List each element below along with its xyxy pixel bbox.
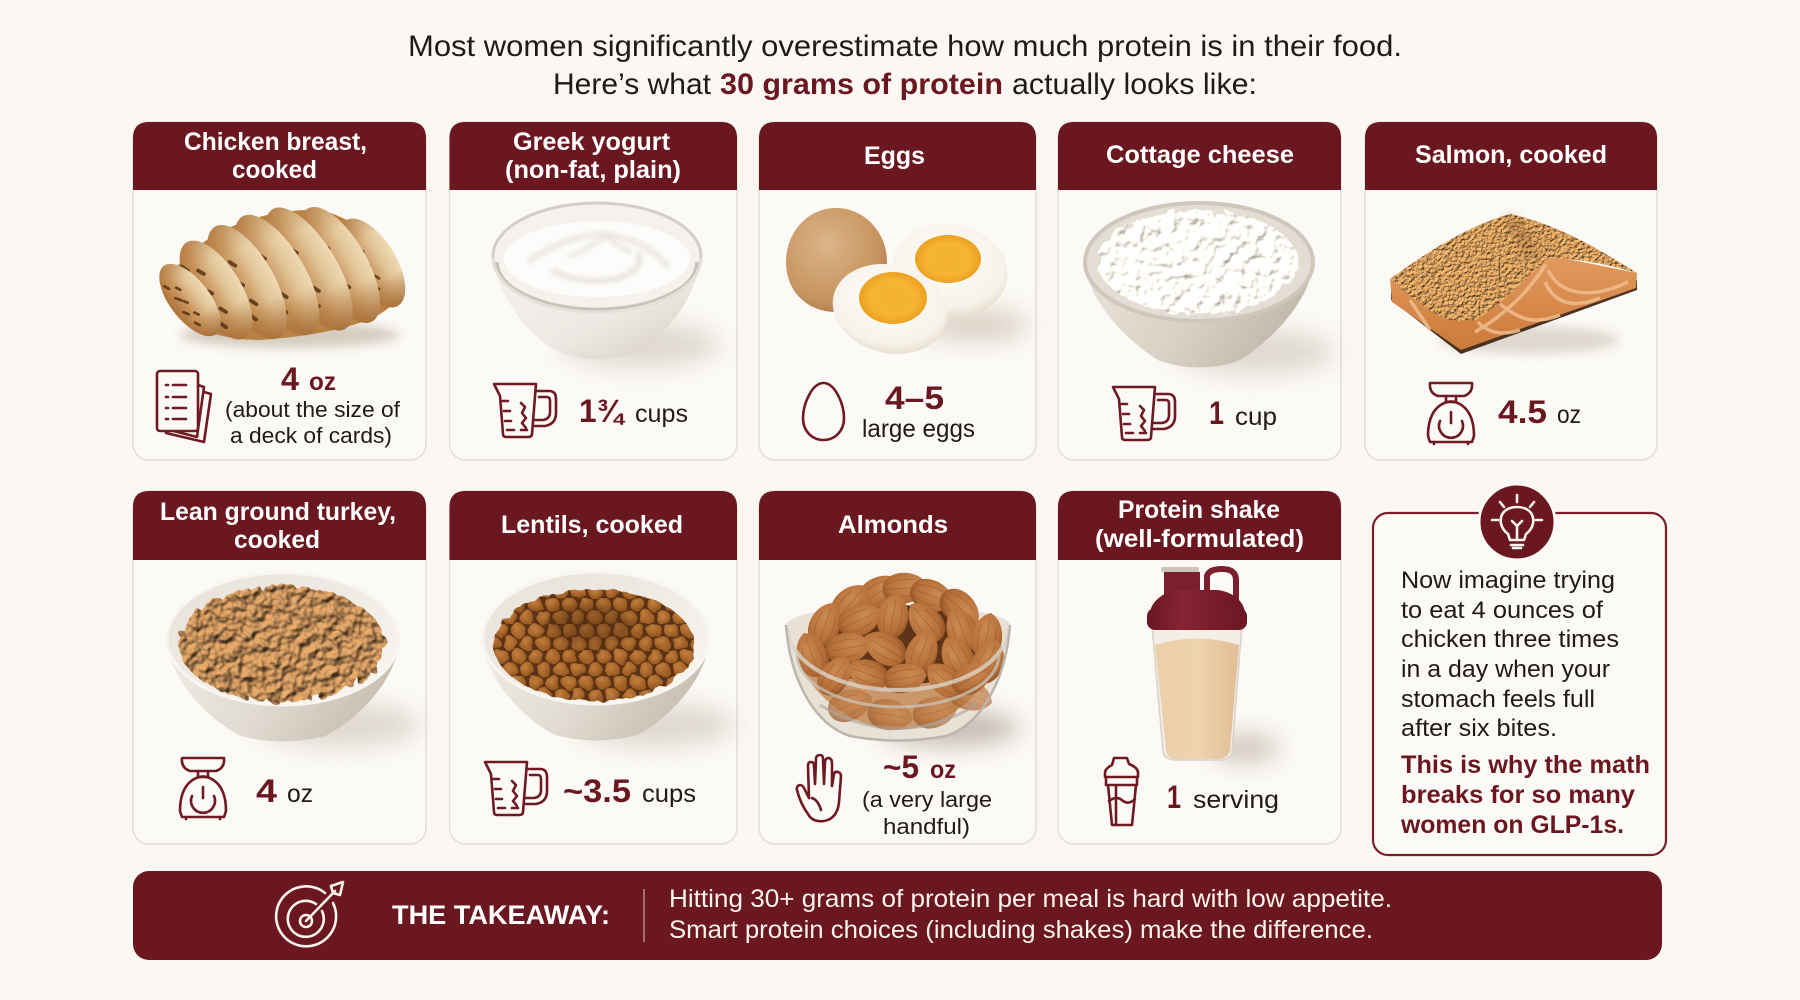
- photo: yogurt in glass bowl: [493, 203, 720, 367]
- amount: 1 cup: [1209, 395, 1277, 431]
- panel: greek yogurt: [450, 122, 737, 460]
- icon: measuring cup: [485, 762, 547, 815]
- icon: lightbulb badge: [1479, 484, 1555, 560]
- callout text: [1400, 567, 1650, 839]
- amount: ~3.5 cups: [563, 773, 696, 809]
- heading: chicken breast: [184, 128, 367, 184]
- callout text: after six bites.: [1401, 715, 1557, 742]
- amount: 4.5 oz: 4.5: [1498, 394, 1547, 430]
- callout text: breaks for so many: [1401, 781, 1635, 809]
- takeaway text: Hitting 30+ grams of protein per meal is hard with low appetite.: [669, 885, 1392, 913]
- icon: open hand: [797, 755, 841, 821]
- callout text: chicken three times: [1401, 626, 1619, 653]
- amount: 4 oz: oz: [287, 780, 313, 808]
- heading: lean ground turkey: Lean ground turkey,: [160, 498, 396, 526]
- icon: measuring cup: [494, 384, 556, 437]
- callout: imagine eating chicken: [1373, 484, 1666, 855]
- amount: 4–5 large eggs: 4–5: [885, 380, 944, 416]
- icon: shaker: [1105, 758, 1138, 825]
- title: actually looks like:: [1012, 68, 1257, 101]
- amount: ~5 oz, a very large handful: handful): [883, 814, 970, 839]
- icon: target with arrow: [276, 882, 343, 946]
- heading: almonds: Almonds: [838, 511, 948, 539]
- amount: 4.5 oz: [1498, 394, 1581, 430]
- amount: 4 oz, deck of cards: (about the size of: [225, 397, 401, 422]
- heading: protein shake: [1095, 496, 1304, 553]
- amount: 4.5 oz: oz: [1557, 401, 1581, 429]
- photo: bowl of ground turkey: [166, 573, 420, 747]
- photo: bowl of cottage cheese: [1084, 203, 1335, 374]
- panel: cottage cheese: [1058, 122, 1341, 460]
- amount: ~5 oz, a very large handful: ~5: [883, 749, 919, 785]
- photo: salmon fillet: [1390, 214, 1637, 354]
- callout text: women on GLP-1s.: [1400, 811, 1624, 839]
- icon: measuring cup: [1113, 387, 1175, 440]
- panel: salmon: [1365, 122, 1657, 460]
- amount: 4 oz, deck of cards: a deck of cards): [230, 423, 392, 448]
- amount: 1¾ cups: [579, 393, 688, 429]
- amount: 1 serving: serving: [1193, 786, 1279, 814]
- panel: takeaway banner: [133, 871, 1662, 960]
- heading: salmon: Salmon, cooked: [1415, 141, 1607, 169]
- amount: 1¾ cups: cups: [635, 400, 688, 428]
- callout text: to eat 4 ounces of: [1401, 597, 1603, 624]
- heading: lentils: Lentils, cooked: [501, 511, 683, 539]
- photo: shaker bottle: [1147, 567, 1279, 762]
- amount: 4 oz, deck of cards: [225, 361, 401, 448]
- callout text: in a day when your: [1401, 656, 1610, 683]
- callout text: Now imagine trying: [1401, 567, 1615, 594]
- heading: protein shake: Protein shake: [1118, 496, 1280, 524]
- photo: glass bowl of almonds: [786, 567, 1020, 746]
- amount: 4 oz: [256, 773, 313, 809]
- amount: 4–5 large eggs: large eggs: [862, 415, 975, 443]
- amount: ~5 oz, a very large handful: (a very large: [862, 787, 992, 812]
- panel: chicken breast: [133, 122, 426, 460]
- heading: greek yogurt: (non-fat, plain): [505, 156, 681, 184]
- heading: chicken breast: Chicken breast,: [184, 128, 367, 156]
- title: 30 grams of protein: [720, 68, 1003, 101]
- amount: 1¾ cups: 1¾: [579, 393, 625, 429]
- title: [408, 30, 1402, 101]
- icon: kitchen scale: [180, 758, 226, 819]
- amount: 4–5 large eggs: [862, 380, 975, 443]
- amount: ~5 oz, a very large handful: [862, 749, 992, 839]
- heading: greek yogurt: [505, 128, 681, 184]
- heading: protein shake: (well-formulated): [1095, 525, 1304, 553]
- takeaway label: THE TAKEAWAY:: [392, 900, 610, 930]
- amount: 1 cup: cup: [1235, 403, 1277, 431]
- amount: 1 serving: [1167, 779, 1279, 815]
- amount: 1 serving: 1: [1167, 779, 1181, 815]
- icon: egg: [803, 383, 844, 440]
- amount: 4 oz: 4: [256, 773, 277, 809]
- photo: bowl of lentils: [482, 572, 735, 747]
- amount: 4 oz, deck of cards: oz: [309, 368, 336, 396]
- photo: sliced chicken: [148, 195, 419, 351]
- amount: 4 oz, deck of cards: 4: [281, 361, 299, 397]
- panel: lentils: [450, 491, 737, 844]
- photo: whole and halved eggs: [786, 208, 1030, 366]
- panel: eggs: [759, 122, 1036, 460]
- takeaway text: [669, 885, 1392, 944]
- amount: ~5 oz, a very large handful: oz: [930, 756, 956, 784]
- amount: ~3.5 cups: ~3.5: [563, 773, 631, 809]
- amount: ~3.5 cups: cups: [642, 780, 696, 808]
- callout text: stomach feels full: [1401, 686, 1595, 713]
- heading: chicken breast: cooked: [232, 156, 317, 184]
- heading: lean ground turkey: [160, 498, 396, 554]
- heading: cottage cheese: Cottage cheese: [1106, 141, 1294, 169]
- heading: lean ground turkey: cooked: [234, 526, 320, 554]
- icon: kitchen scale: [1428, 383, 1474, 444]
- panel: protein shake: [1058, 491, 1341, 844]
- heading: greek yogurt: Greek yogurt: [513, 128, 671, 156]
- panel: lean ground turkey: [133, 491, 426, 844]
- callout text: This is why the math: [1401, 751, 1650, 779]
- icon: deck of cards list: [157, 371, 211, 442]
- takeaway text: Smart protein choices (including shakes) make the difference.: [669, 916, 1373, 944]
- title: Most women significantly overestimate how much protein is in their food.: [408, 30, 1402, 63]
- panel: almonds: [759, 491, 1036, 844]
- heading: eggs: Eggs: [864, 142, 925, 170]
- title: Here’s what: [553, 68, 712, 101]
- amount: 1 cup: 1: [1209, 395, 1224, 431]
